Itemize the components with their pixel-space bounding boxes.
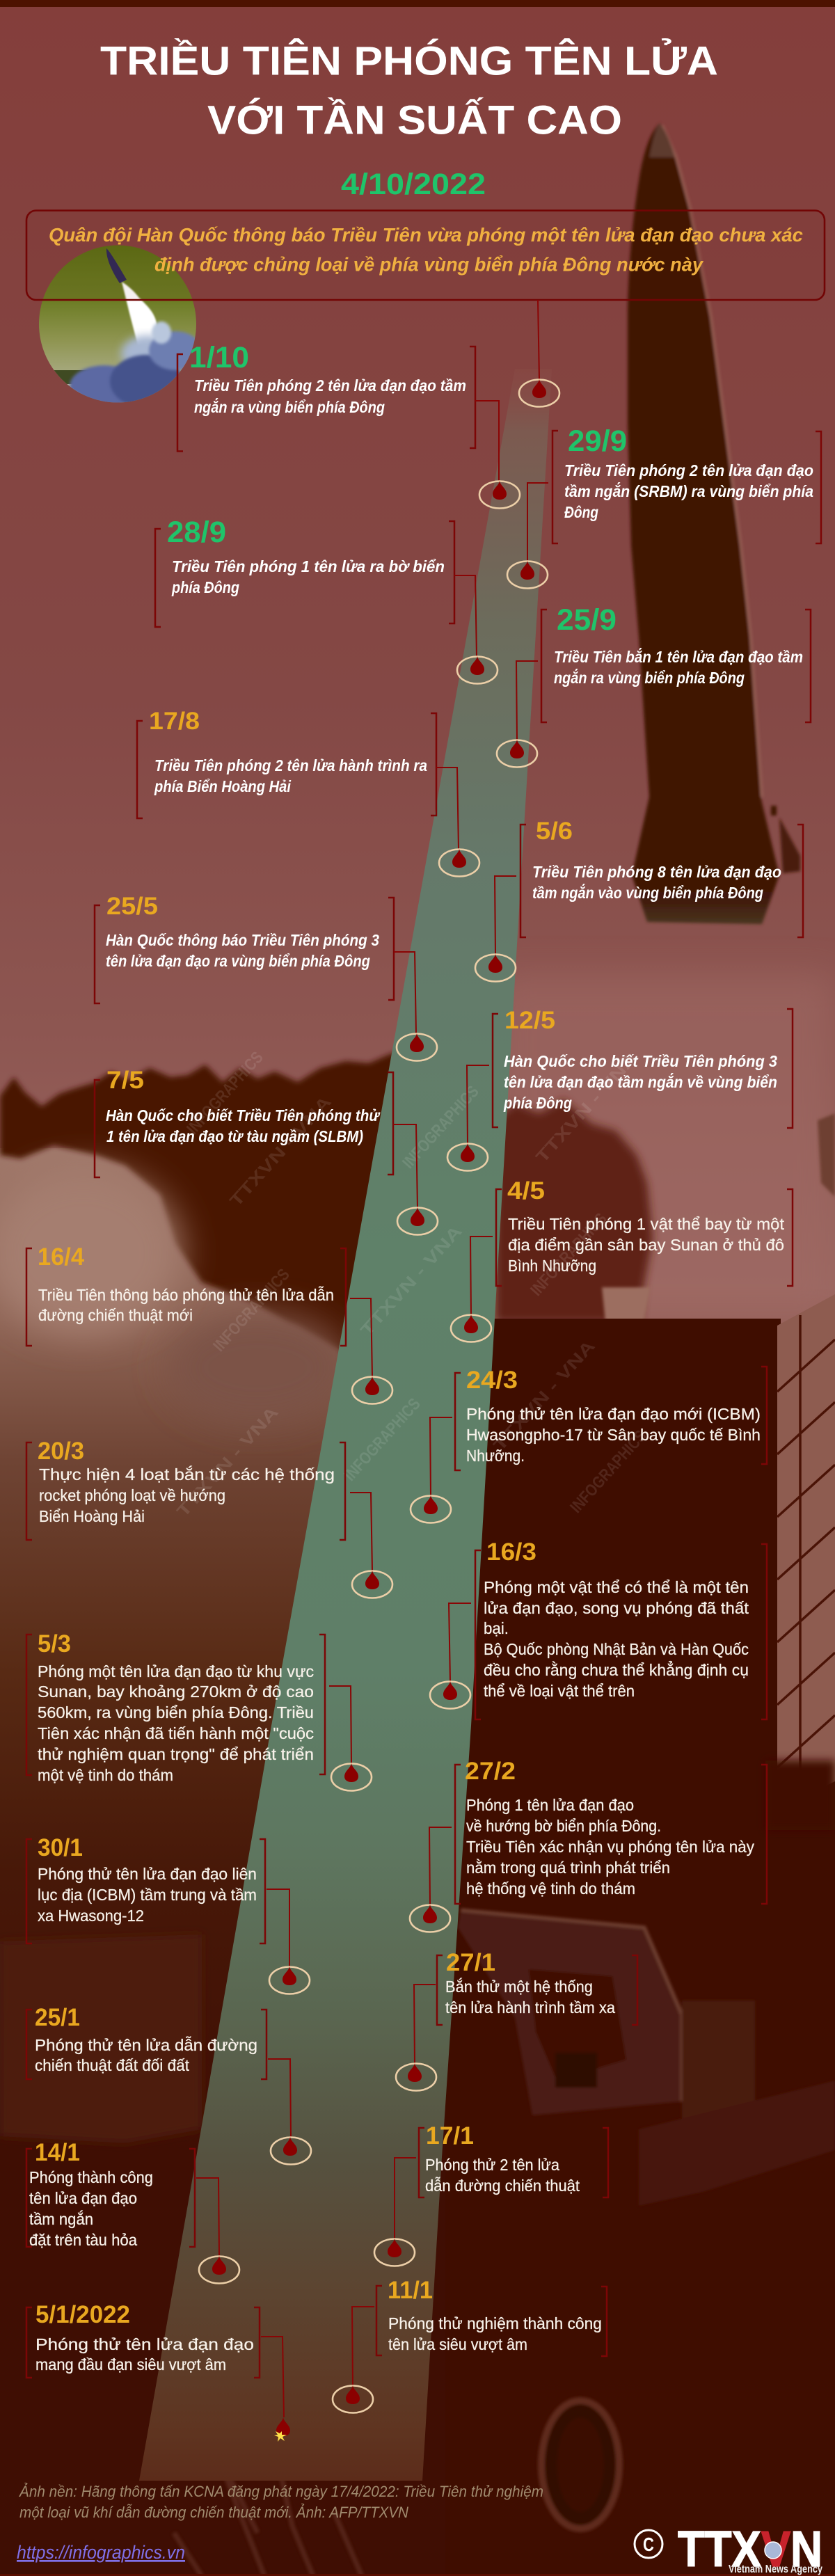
description: Nhưỡng. — [466, 1447, 525, 1465]
bracket — [493, 1009, 793, 1128]
marker — [397, 1033, 437, 1060]
connector — [436, 768, 459, 850]
marker — [451, 1314, 491, 1342]
event: 5/1/2022 — [26, 2301, 290, 2442]
photo credit caption: một loại vũ khí dẫn đường chiến thuật mới. Ảnh: AFP/TTXVN — [19, 2504, 408, 2521]
description: đều cho rằng chưa thể khẳng định cụ — [484, 1660, 749, 1679]
callout text — [49, 224, 803, 276]
description — [29, 2168, 153, 2249]
description: bại. — [484, 1619, 509, 1637]
connector — [414, 1985, 436, 2064]
description: lửa đạn đạo, song vụ phóng đã thất — [484, 1599, 749, 1617]
event: 17/1 — [374, 2122, 608, 2266]
description: hệ thống vệ tinh do thám — [466, 1879, 635, 1898]
watermarks — [173, 1048, 651, 1521]
marker — [411, 1495, 451, 1522]
watermarks: INFOGRAPHICS — [340, 1394, 424, 1485]
date: 24/3 — [466, 1367, 518, 1394]
bracket — [137, 713, 436, 818]
date: 5/6 — [536, 818, 573, 845]
description: Đông — [564, 503, 598, 521]
tree line left — [0, 1044, 445, 1461]
description: Triều Tiên bắn 1 tên lửa đạn đạo tầm — [554, 647, 803, 666]
event: 4/5 — [451, 1177, 793, 1342]
connector — [429, 1827, 452, 1905]
watermarks: INFOGRAPHICS — [566, 1426, 651, 1517]
panel: headline callout — [26, 210, 825, 380]
description: một vệ tinh do thám — [38, 1766, 173, 1784]
marker — [410, 1905, 450, 1932]
watermarks: TTXVN - VNA — [357, 1222, 466, 1340]
connector — [352, 2307, 374, 2386]
date: 25/9 — [557, 603, 617, 637]
date: 25/1 — [35, 2004, 80, 2031]
event: 25/9 — [497, 603, 811, 767]
connector — [475, 401, 499, 482]
connector — [430, 1417, 452, 1496]
date: 1/10 — [189, 341, 249, 374]
bracket — [26, 1839, 265, 1943]
description: tên lửa đạn đạo tầm ngắn về vùng biển — [504, 1072, 777, 1091]
description: Hàn Quốc cho biết Triều Tiên phóng 3 — [504, 1052, 777, 1070]
description: phía Đông — [171, 578, 239, 596]
connector — [393, 1124, 418, 1208]
event: 16/3 — [430, 1539, 767, 1719]
left machinery — [0, 1934, 202, 2143]
title: TRIỀU TIÊN PHÓNG TÊN LỬA — [100, 39, 718, 84]
description — [466, 1796, 754, 1898]
bracket — [26, 1442, 345, 1540]
photo credit caption: Ảnh nền: Hãng thông tấn KCNA đăng phát ngày 17/4/2022: Triều Tiên thử nghiệm — [18, 2483, 543, 2500]
description: nằm trong quá trình phát triển — [466, 1859, 670, 1877]
date: 17/1 — [426, 2122, 474, 2149]
flight beam — [139, 369, 552, 2481]
watermarks: INFOGRAPHICS — [209, 1265, 294, 1355]
date: 4/5 — [507, 1177, 545, 1204]
description: tên lửa hành trình tầm xa — [445, 1998, 615, 2017]
description — [35, 2335, 254, 2374]
description — [154, 756, 427, 795]
description: Hàn Quốc thông báo Triều Tiên phóng 3 — [106, 931, 379, 949]
watermarks: INFOGRAPHICS — [399, 1082, 483, 1172]
marker — [374, 2239, 415, 2266]
description: Bình Nhưỡng — [508, 1257, 596, 1275]
description — [532, 863, 781, 902]
marker — [269, 1966, 310, 1994]
description: Phóng thành công — [29, 2168, 153, 2186]
description — [194, 376, 466, 416]
description: Phóng một tên lửa đạn đạo từ khu vực — [38, 1662, 314, 1680]
bracket — [95, 1072, 393, 1177]
connector — [267, 1889, 289, 1967]
event: 7/5 — [95, 1067, 438, 1234]
event: 11/1 — [333, 2277, 607, 2413]
description: lục địa (ICBM) tầm trung và tầm — [38, 1886, 257, 1904]
description: mang đầu đạn siêu vượt âm — [35, 2355, 226, 2374]
globe — [765, 2542, 781, 2559]
description: Triều Tiên thông báo phóng thử tên lửa dẫn — [38, 1286, 334, 1304]
description — [466, 1405, 761, 1465]
event: 27/1 — [396, 1949, 637, 2090]
event: 1/10 — [177, 341, 520, 508]
description: Bắn thử một hệ thống — [445, 1978, 593, 1996]
bracket — [376, 2286, 607, 2356]
description: thể về loại vật thể trên — [484, 1682, 635, 1700]
description: Sunan, bay khoảng 270km ở độ cao — [38, 1683, 314, 1701]
date: 25/5 — [106, 893, 158, 920]
logo: TTXVN — [635, 2522, 822, 2576]
connector — [261, 2337, 284, 2417]
connector — [527, 483, 548, 562]
title — [100, 39, 718, 143]
event: 29/9 — [507, 424, 821, 589]
date: 16/3 — [486, 1539, 536, 1566]
description — [171, 557, 445, 596]
bracket — [455, 1765, 767, 1904]
bracket — [541, 610, 811, 722]
connector — [467, 1065, 489, 1144]
description: Biển Hoàng Hải — [39, 1507, 145, 1525]
icon: launch spark — [274, 2431, 287, 2442]
description: Tiên xác nhận đã tiến hành một "cuộc — [38, 1724, 314, 1742]
description: Triều Tiên xác nhận vụ phóng tên lửa này — [466, 1838, 754, 1856]
watermarks: TTXVN - VNA — [173, 1403, 283, 1521]
marker: launch drop — [276, 2417, 290, 2436]
event: 5/3 — [26, 1630, 372, 1791]
photo credit caption — [18, 2483, 543, 2521]
date: 5/1/2022 — [35, 2301, 130, 2328]
title: VỚI TẦN SUẤT CAO — [207, 97, 622, 143]
description: phía Đông — [503, 1094, 572, 1112]
date: 7/5 — [106, 1067, 144, 1094]
marker — [507, 561, 548, 589]
description: dẫn đường chiến thuật — [425, 2177, 580, 2195]
description — [564, 461, 813, 521]
icon: rocket launch photo — [39, 245, 202, 408]
bracket — [26, 1248, 346, 1346]
description: Triều Tiên phóng 2 tên lửa hành trình ra — [154, 756, 427, 774]
connector — [516, 661, 538, 740]
date: 16/4 — [38, 1243, 85, 1271]
description: tầm ngắn — [29, 2210, 93, 2228]
connector — [329, 1686, 351, 1764]
date: 29/9 — [568, 424, 627, 458]
marker — [497, 740, 537, 767]
date: 12/5 — [504, 1007, 555, 1034]
description: Triều Tiên phóng 8 tên lửa đạn đạo — [532, 863, 781, 881]
top bar — [0, 0, 835, 7]
watermarks: INFOGRAPHICS — [527, 1209, 611, 1300]
marker — [396, 2063, 436, 2090]
event: 5/6 — [475, 818, 803, 981]
description: Phóng 1 tên lửa đạn đạo — [466, 1796, 634, 1814]
connector — [196, 2178, 219, 2257]
description — [106, 1106, 381, 1145]
date: 5/3 — [38, 1630, 71, 1657]
latest date: 4/10/2022 — [341, 168, 486, 201]
launcher vehicle — [458, 1910, 835, 2529]
callout text: Quân đội Hàn Quốc thông báo Triều Tiên vừa phóng một tên lửa đạn đạo chưa xác — [49, 224, 803, 246]
description: Triều Tiên phóng 2 tên lửa đạn đạo tầm — [194, 376, 466, 395]
connector — [394, 952, 416, 1034]
date: 17/8 — [149, 708, 200, 735]
bottom bar — [0, 2574, 835, 2576]
event: 25/5 — [95, 893, 437, 1060]
description: Phóng thử tên lửa đạn đạo mới (ICBM) — [466, 1405, 761, 1423]
description: thử nghiệm quan trọng" để phát triển — [38, 1745, 314, 1763]
description — [425, 2156, 580, 2195]
rocket silhouette — [628, 123, 800, 924]
bracket — [520, 825, 803, 937]
description — [39, 1465, 335, 1525]
date: 20/3 — [38, 1438, 84, 1465]
description: Phóng thử 2 tên lửa — [425, 2156, 559, 2174]
connector to first marker — [538, 300, 539, 380]
description — [503, 1052, 777, 1112]
bracket — [26, 2307, 260, 2378]
description: Phóng thử tên lửa đạn đạo — [35, 2335, 254, 2353]
bracket — [26, 1635, 325, 1775]
marker — [333, 2385, 373, 2413]
event: 14/1 — [26, 2139, 239, 2284]
description: chiến thuật đất đối đất — [35, 2056, 190, 2074]
marker — [271, 2137, 311, 2164]
description — [554, 647, 803, 687]
right cloud — [818, 1113, 835, 1197]
description: Phóng thử nghiệm thành công — [388, 2314, 602, 2332]
bracket — [26, 2010, 267, 2079]
marker — [430, 1681, 470, 1709]
connector — [454, 575, 477, 657]
event: 20/3 — [26, 1438, 392, 1598]
connector — [268, 2059, 291, 2138]
bracket — [95, 898, 394, 1003]
connector — [350, 1298, 372, 1377]
description: đặt trên tàu hỏa — [29, 2231, 137, 2249]
description: 560km, ra vùng biển phía Đông. Triều — [38, 1703, 314, 1722]
description — [38, 1286, 334, 1324]
event: 17/8 — [137, 708, 479, 877]
description — [38, 1662, 314, 1784]
bracket — [552, 431, 821, 543]
marker — [199, 2256, 239, 2284]
description: về hướng bờ biển phía Đông. — [466, 1817, 661, 1835]
wordmark: TTXVN — [678, 2522, 822, 2576]
description: xa Hwasong-12 — [38, 1907, 144, 1925]
description: tầm ngắn vào vùng biển phía Đông — [532, 883, 763, 902]
event: 25/1 — [26, 2004, 311, 2164]
event: 12/5 — [447, 1007, 793, 1170]
description — [484, 1578, 749, 1700]
connector — [350, 1493, 372, 1571]
date: 11/1 — [388, 2277, 433, 2304]
description: đường chiến thuật mới — [38, 1306, 193, 1324]
description — [38, 1865, 257, 1925]
date: 27/1 — [446, 1949, 495, 1976]
tree line right — [495, 1099, 653, 1322]
marker — [447, 1143, 488, 1170]
date: 14/1 — [35, 2139, 80, 2166]
description: Thực hiện 4 loạt bắn từ các hệ thống — [39, 1465, 335, 1484]
event: 16/4 — [26, 1243, 392, 1404]
source link: https://infographics.vn — [17, 2542, 185, 2563]
description: tên lửa đạn đạo ra vùng biển phía Đông — [106, 952, 370, 970]
connector — [449, 1603, 471, 1682]
event: 27/2 — [410, 1758, 767, 1932]
copyright mark: C — [643, 2534, 654, 2555]
description: địa điểm gần sân bay Sunan ở thủ đô — [508, 1236, 784, 1254]
description: 1 tên lửa đạn đạo từ tàu ngầm (SLBM) — [106, 1127, 363, 1145]
watermarks: TTXVN - VNA — [226, 1092, 335, 1211]
bracket — [496, 1189, 793, 1286]
ground vegetation — [174, 2442, 362, 2576]
description: Phóng thử tên lửa dẫn đường — [35, 2036, 257, 2054]
date: 28/9 — [167, 516, 226, 549]
bracket — [26, 2149, 195, 2247]
callout text: định được chủng loại về phía vùng biển phía Đông nước này — [154, 253, 703, 276]
event: 28/9 — [155, 516, 498, 683]
watermarks: INFOGRAPHICS — [183, 1048, 267, 1138]
description: rocket phóng loạt về hướng — [39, 1486, 225, 1504]
marker — [352, 1376, 392, 1404]
description: Triều Tiên phóng 2 tên lửa đạn đạo — [564, 461, 813, 479]
marker — [439, 849, 479, 877]
marker — [352, 1571, 392, 1598]
bracket — [155, 521, 454, 627]
description: Hwasongpho-17 từ Sân bay quốc tế Bình — [466, 1426, 761, 1444]
description — [508, 1215, 785, 1275]
description: Phóng một vật thể có thể là một tên — [484, 1578, 749, 1596]
bracket — [475, 1544, 767, 1719]
description — [388, 2314, 602, 2353]
date: 30/1 — [38, 1834, 83, 1861]
description: ngắn ra vùng biển phía Đông — [194, 397, 385, 416]
bracket — [437, 1955, 637, 2025]
marker — [397, 1207, 438, 1234]
marker — [479, 481, 520, 508]
description — [445, 1978, 615, 2017]
date: 27/2 — [465, 1758, 516, 1785]
description — [35, 2036, 257, 2074]
connector — [495, 876, 516, 955]
marker: 4/10/2022 — [519, 379, 559, 406]
building — [445, 1319, 781, 2576]
event: 24/3 — [411, 1367, 767, 1522]
bracket — [419, 2128, 608, 2197]
description: Bộ Quốc phòng Nhật Bản và Hàn Quốc — [484, 1640, 749, 1658]
marker — [475, 954, 516, 981]
description: phía Biển Hoàng Hải — [154, 777, 292, 795]
bracket — [455, 1367, 767, 1470]
watermarks: TTXVN - VNA — [490, 1337, 599, 1455]
watermarks: TTXVN - VNA — [532, 1049, 642, 1167]
description — [106, 931, 379, 970]
description: tầm ngắn (SRBM) ra vùng biển phía — [564, 482, 813, 500]
description: Phóng thử tên lửa đạn đạo liên — [38, 1865, 257, 1883]
bracket — [177, 347, 475, 451]
connector — [395, 2158, 416, 2239]
description: Triều Tiên phóng 1 tên lửa ra bờ biển — [172, 557, 445, 575]
description: tên lửa đạn đạo — [29, 2189, 137, 2207]
marker — [457, 656, 498, 683]
description: ngắn ra vùng biển phía Đông — [554, 668, 745, 687]
connector — [470, 1237, 493, 1315]
description: tên lửa siêu vượt âm — [388, 2335, 527, 2353]
marker — [331, 1763, 372, 1791]
cloud centre left — [167, 1312, 348, 1423]
copyright mark — [635, 2530, 662, 2558]
description: Hàn Quốc cho biết Triều Tiên phóng thử — [106, 1106, 381, 1124]
description: Triều Tiên phóng 1 vật thể bay từ một — [508, 1215, 785, 1233]
event: 30/1 — [26, 1834, 310, 1994]
